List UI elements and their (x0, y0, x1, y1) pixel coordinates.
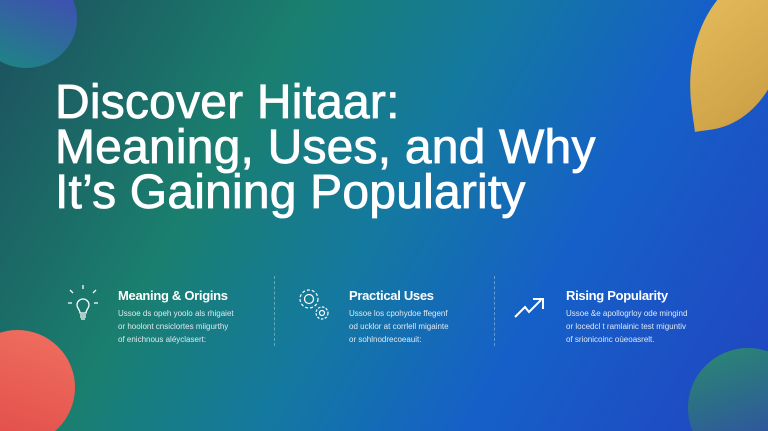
decorative gold leaf top-right (674, 0, 768, 132)
decorative circle top-left (0, 0, 77, 68)
column 3: rising popularity (514, 288, 687, 344)
body text: of srionicoinc oùeoasrelt. (566, 335, 654, 344)
title: Meaning, Uses, and Why (55, 121, 596, 174)
decorative circle bottom-right (688, 348, 768, 431)
icon: gears (299, 289, 329, 320)
body text: of enichnous aléyclasert: (118, 335, 206, 344)
title (55, 76, 596, 219)
body text (566, 309, 687, 344)
title: Discover Hitaar: (55, 76, 400, 129)
heading: Rising Popularity (566, 288, 668, 303)
title: It’s Gaining Popularity (55, 166, 526, 219)
heading: Practical Uses (349, 288, 434, 303)
body text (349, 309, 449, 344)
decorative red circle bottom-left (0, 330, 75, 431)
icon: lightbulb (68, 285, 98, 320)
column 2: practical uses (299, 288, 449, 344)
body text: Ussoe los cpohydoe ffegenf (349, 309, 448, 318)
body text: or sohlnodrecoeauit: (349, 335, 422, 344)
column 1: meaning & origins (68, 285, 234, 344)
body text: Ussoe ds opeh yoolo als rhigaiet (118, 309, 234, 318)
body text: od ucklor at corrlell migainte (349, 322, 449, 331)
body text: or locedcl t ramlainic test miguntiv (566, 322, 686, 331)
body text: Ussoe &e apollogrloy ode mingind (566, 309, 687, 318)
body text: or hoolont cnsiclortes miigurthy (118, 322, 228, 331)
body text (118, 309, 234, 344)
heading: Meaning & Origins (118, 288, 228, 303)
icon: trending arrow (514, 298, 544, 318)
